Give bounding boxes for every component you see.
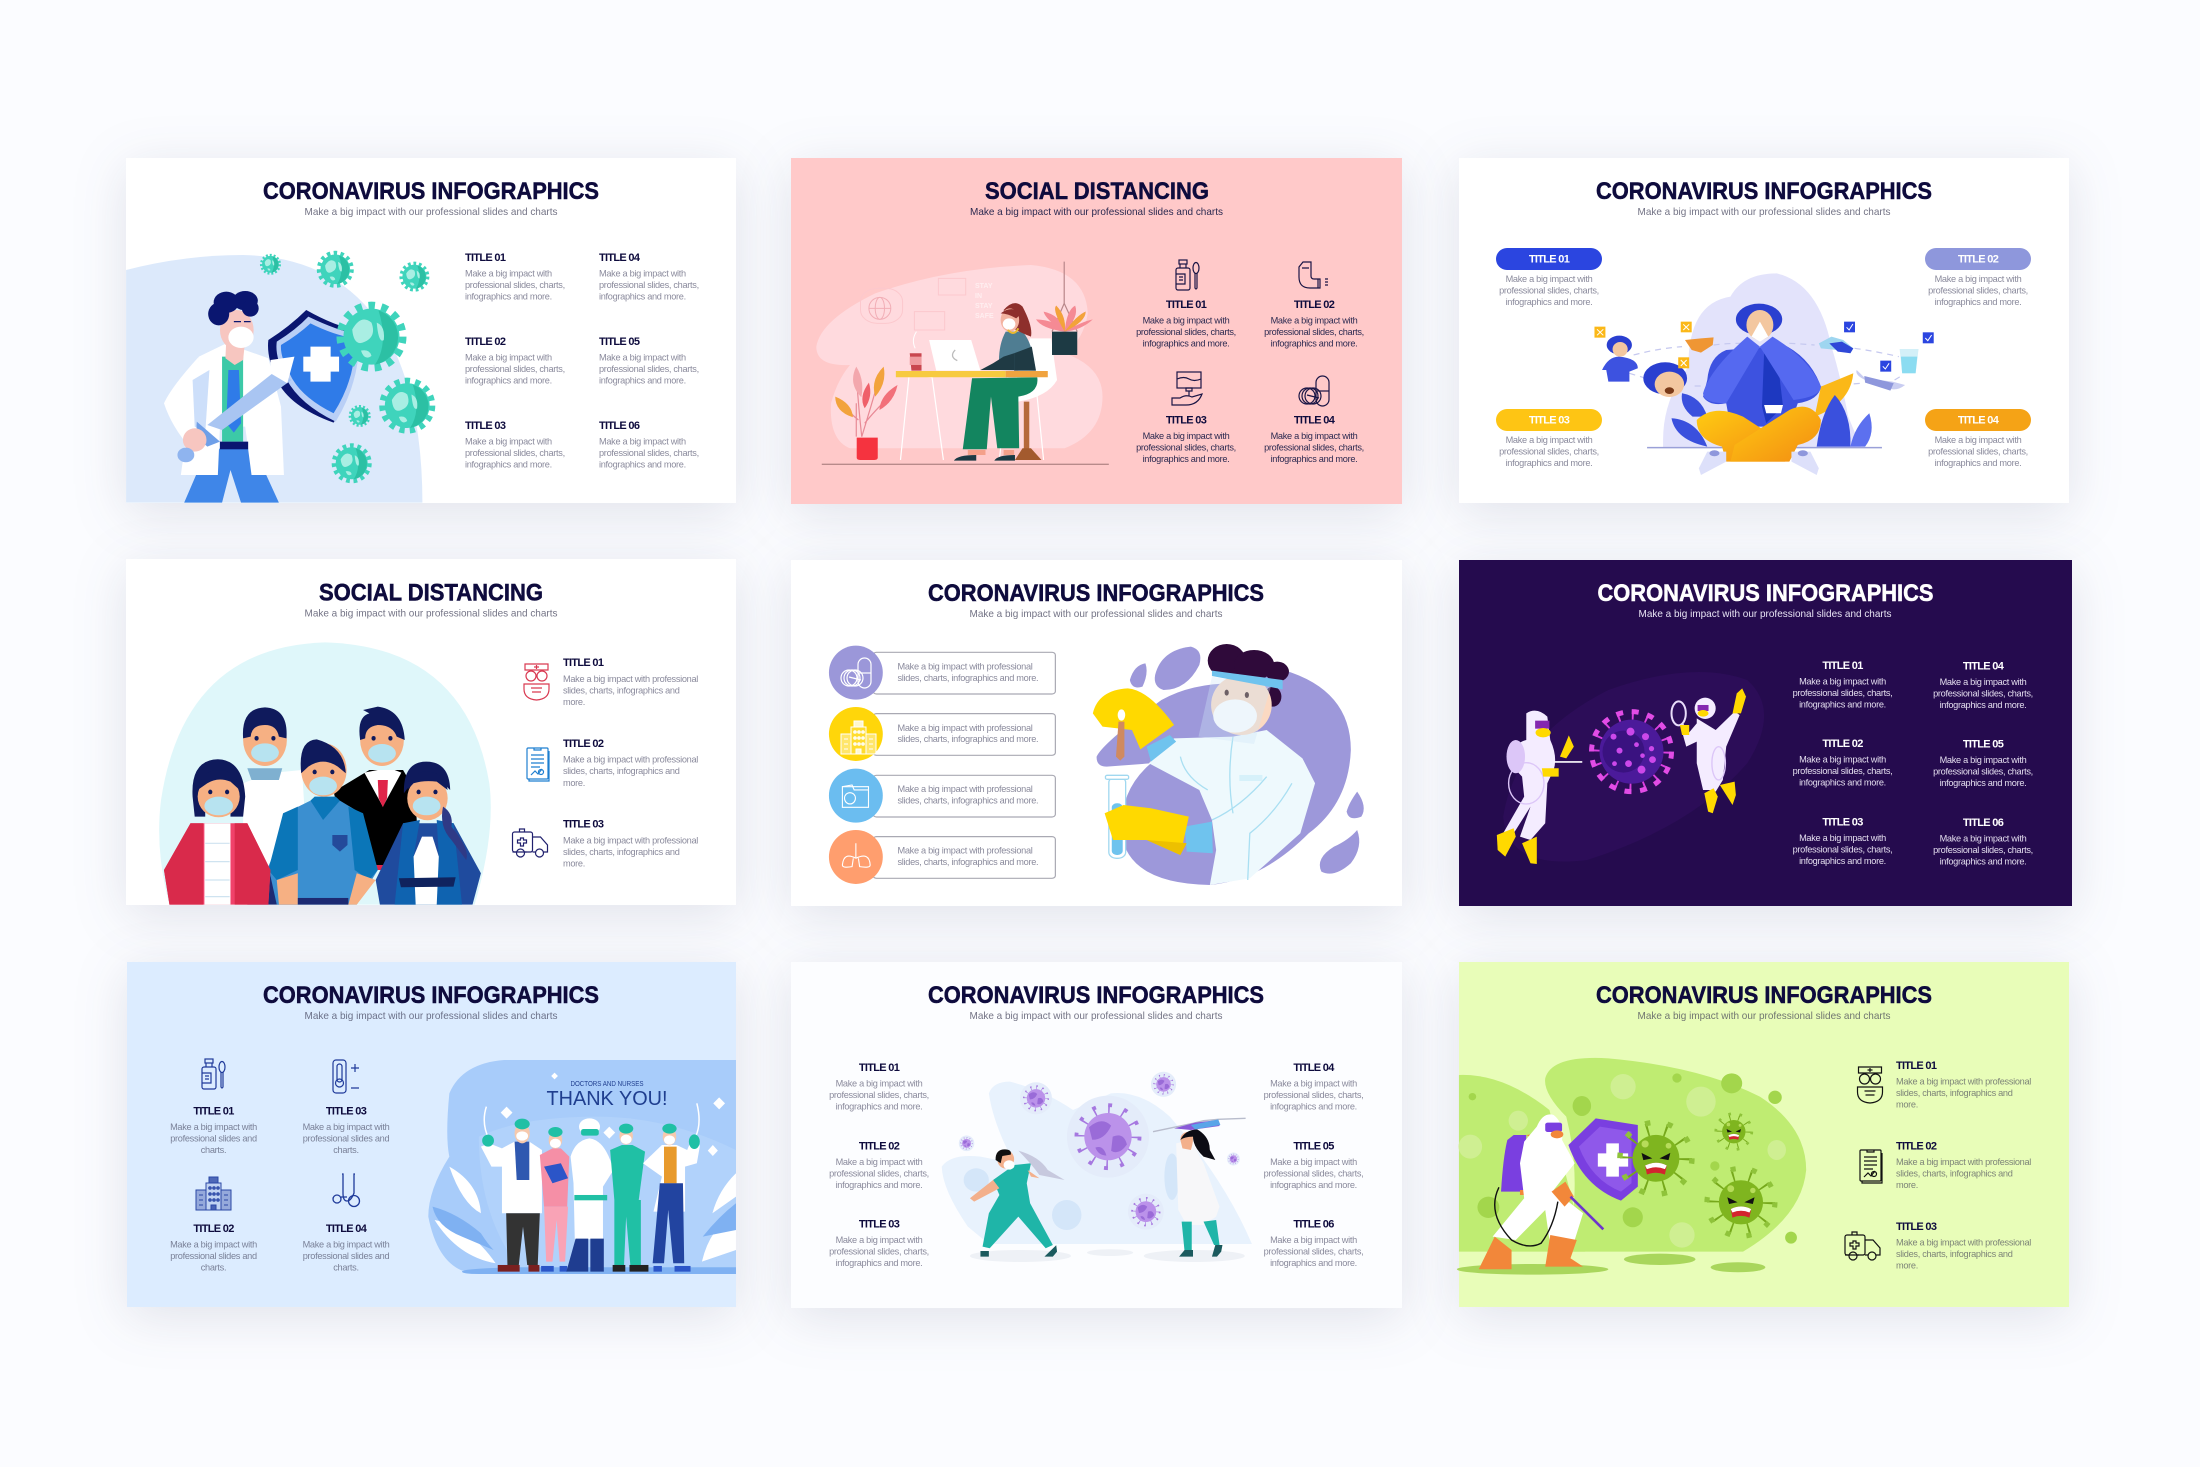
text block: titles 01 to 06: TITLE 05 (1963, 738, 2004, 750)
pill: title 03: TITLE 03 (1529, 414, 1570, 426)
text block: titles 01 to 06: TITLE 06 (1293, 1218, 1334, 1230)
text block: titles 01 to 06: professional slides, charts, (1793, 688, 1892, 698)
text block: titles 01 to 06: infographics and more. (465, 292, 552, 302)
panel: white slide with virus and medical staff (791, 962, 1402, 1308)
pill: title 02: TITLE 02 (1958, 254, 1999, 266)
text block: titles 01 to 03: Make a big impact with professional (563, 754, 698, 764)
subheading: Make a big impact with our professional slides and charts (304, 1011, 558, 1022)
text block: titles 01 to 04: infographics and more. (1271, 454, 1357, 464)
text block: faint stay safe note: STAY (975, 283, 993, 290)
text block: descriptions: professional slides, charts, (1499, 286, 1599, 296)
text block: faint stay safe note: STAY (975, 303, 993, 310)
text block: descriptions: Make a big impact with (1506, 274, 1593, 284)
text block: titles 01 to 06: professional slides, charts, (599, 280, 699, 290)
text block: titles 01 to 06: Make a big impact with (465, 268, 552, 278)
text block: titles 01 to 06: TITLE 01 (465, 252, 506, 264)
text block: titles 01 to 06: infographics and more. (465, 376, 552, 386)
text block: titles 01 to 06: infographics and more. (836, 1180, 922, 1190)
text block: descriptions: professional slides, charts, (1499, 446, 1599, 456)
text block: titles 01 to 04: professional slides and (170, 1134, 257, 1144)
text block: list descriptions: slides, charts, infographics and more. (898, 857, 1038, 867)
text block: titles 01 to 04: Make a big impact with (170, 1122, 257, 1132)
text block: titles 01 to 04: charts. (333, 1145, 359, 1155)
text block: descriptions: infographics and more. (1506, 297, 1592, 307)
text block: titles 01 to 03: slides, charts, infographics and (563, 766, 680, 776)
heading: SOCIAL DISTANCING (985, 178, 1209, 205)
text block: titles 01 to 03: more. (1896, 1260, 1918, 1270)
icon: ambulance (512, 829, 548, 857)
text block: titles 01 to 04: TITLE 03 (1166, 414, 1207, 426)
text block: titles 01 to 06: infographics and more. (836, 1258, 922, 1268)
text block: titles 01 to 06: professional slides, charts, (1933, 766, 2033, 776)
text block: titles 01 to 06: professional slides, charts, (1793, 766, 1892, 776)
text block: titles 01 to 04: charts. (333, 1262, 359, 1272)
illustration: person sneezing with do and don't items (1594, 273, 1934, 475)
text block: list descriptions: slides, charts, infographics and more. (898, 673, 1038, 683)
text block: titles 01 to 06: Make a big impact with (1799, 833, 1886, 843)
subheading: Make a big impact with our professional slides and charts (304, 608, 558, 620)
text block: titles 01 to 06: Make a big impact with (1799, 754, 1886, 764)
icon: medical report (527, 748, 549, 781)
text block: titles 01 to 04: Make a big impact with (1271, 316, 1358, 326)
subheading: Make a big impact with our professional slides and charts (1638, 207, 1890, 218)
illustration: lab technician with test tube (829, 644, 1364, 885)
text block: descriptions: professional slides, charts, (1928, 446, 2028, 456)
text block: list descriptions: slides, charts, infographics and more. (898, 796, 1038, 806)
text block: titles 01 to 06: infographics and more. (465, 460, 552, 470)
text block: titles 01 to 06: TITLE 05 (1293, 1140, 1334, 1152)
text block: titles 01 to 06: Make a big impact with (465, 352, 552, 362)
text block: list descriptions: Make a big impact with professional (898, 723, 1033, 733)
text block: titles 01 to 04: TITLE 04 (326, 1223, 368, 1235)
icon: pills (1299, 376, 1329, 406)
text block: titles 01 to 06: Make a big impact with (1270, 1078, 1357, 1088)
text block: titles 01 to 06: infographics and more. (836, 1102, 922, 1112)
text block: titles 01 to 03: TITLE 02 (1896, 1140, 1937, 1152)
text block: descriptions (1499, 274, 2028, 468)
text block: titles 01 to 04: TITLE 01 (193, 1106, 234, 1118)
panel: coronavirus infographics white slide with doctor and shield (126, 158, 736, 503)
subheading: Make a big impact with our professional slides and charts (1638, 609, 1892, 620)
illustration: nurse and doctor fighting purple virus (942, 1072, 1252, 1262)
text block: titles 01 to 03: more. (563, 697, 585, 707)
icon: hospital (196, 1177, 231, 1210)
icon: medicine bottle (202, 1059, 225, 1089)
text block: titles 01 to 03: Make a big impact with professional (1896, 1238, 2031, 1248)
subheading: Make a big impact with our professional slides and charts (970, 1011, 1222, 1022)
text block: list descriptions: Make a big impact with professional (898, 846, 1033, 856)
illustration: doctors and nurses thank you (428, 1060, 736, 1274)
text block: titles 01 to 06: professional slides, charts, (1933, 688, 2033, 698)
icon: medicine bottle (1176, 260, 1199, 290)
text block: titles 01 to 06: Make a big impact with (465, 436, 552, 446)
text block: titles 01 to 03: more. (1896, 1180, 1918, 1190)
text block: descriptions: infographics and more. (1935, 297, 2021, 307)
text block: titles 01 to 06: Make a big impact with (836, 1078, 923, 1088)
text block: titles 01 to 06: professional slides, charts, (829, 1246, 929, 1256)
text block: titles 01 to 06: TITLE 03 (465, 420, 506, 432)
text block: titles 01 to 06: TITLE 06 (599, 420, 640, 432)
text block: descriptions: infographics and more. (1935, 458, 2021, 468)
pill: title 03 (1496, 409, 1602, 431)
text block: titles 01 to 06: TITLE 04 (1963, 660, 2005, 672)
text block: titles 01 to 03: slides, charts, infographics and (563, 686, 680, 696)
text block: titles 01 to 06: professional slides, charts, (465, 364, 565, 374)
text block: thank you: THANK YOU! (546, 1088, 668, 1110)
text block: titles 01 to 04: charts. (201, 1145, 226, 1155)
text block: titles 01 to 06: TITLE 02 (859, 1140, 900, 1152)
text block: titles 01 to 03: more. (563, 858, 585, 868)
text block: titles 01 to 06: infographics and more. (1940, 856, 2026, 866)
panel: light blue thank-you slide (127, 962, 736, 1307)
panel: dark purple infographic slide (1459, 560, 2072, 906)
text block: titles 01 to 06: TITLE 02 (465, 336, 506, 348)
subheading: Make a big impact with our professional slides and charts (1638, 1011, 1890, 1022)
text block: titles 01 to 03: TITLE 03 (563, 818, 604, 830)
text block: list descriptions: Make a big impact with professional (898, 784, 1033, 794)
text block: titles 01 to 06: Make a big impact with (1940, 755, 2027, 765)
text block: titles 01 to 06: TITLE 03 (1822, 816, 1863, 828)
text block: titles 01 to 06: professional slides, charts, (1264, 1090, 1363, 1100)
text block: titles 01 to 06: professional slides, charts, (465, 280, 565, 290)
text block: titles 01 to 03: slides, charts, infographics and (1896, 1088, 2013, 1098)
icon: hospital (841, 721, 876, 754)
text block: titles 01 to 06 (829, 1062, 1363, 1268)
text block: titles 01 to 06: infographics and more. (599, 292, 686, 302)
text block: titles 01 to 06: infographics and more. (1799, 856, 1886, 866)
heading: CORONAVIRUS INFOGRAPHICS (1596, 982, 1932, 1009)
text block: titles 01 to 04: infographics and more. (1143, 338, 1229, 348)
text block: titles 01 to 04: TITLE 02 (1294, 299, 1335, 311)
text block: titles 01 to 03: TITLE 03 (1896, 1221, 1937, 1233)
text block: list descriptions: slides, charts, infographics and more. (898, 734, 1038, 744)
text block: titles 01 to 06 (1793, 660, 2033, 866)
text block: titles 01 to 06: infographics and more. (599, 460, 686, 470)
text block: descriptions: infographics and more. (1506, 458, 1592, 468)
text block: faint stay safe note: SAFE (975, 313, 994, 320)
icon: nurse face (524, 664, 549, 700)
text block: titles 01 to 06: infographics and more. (599, 376, 686, 386)
text block: titles 01 to 04 (1136, 299, 1364, 464)
text block: titles 01 to 04: professional slides and (303, 1251, 389, 1261)
text block: titles 01 to 04: Make a big impact with (1271, 431, 1358, 441)
text block: titles 01 to 06: professional slides, charts, (1264, 1168, 1363, 1178)
text block: titles 01 to 03: Make a big impact with professional (563, 674, 698, 684)
illustration: doctor with shield fighting green viruses (126, 254, 431, 503)
panel: infographics with pills and sitting person (1459, 158, 2069, 503)
text block: titles 01 to 06: Make a big impact with (1270, 1157, 1357, 1167)
heading: CORONAVIRUS INFOGRAPHICS (928, 982, 1264, 1009)
icon: stethoscope (333, 1174, 360, 1206)
text block: titles 01 to 06: Make a big impact with (1270, 1235, 1357, 1245)
text block: titles 01 to 06: professional slides, charts, (1793, 844, 1892, 854)
text block: titles 01 to 03: slides, charts, infographics and (563, 847, 680, 857)
subheading: Make a big impact with our professional slides and charts (304, 207, 558, 218)
text block: doctors and nurses caption: DOCTORS AND NURSES (570, 1079, 644, 1088)
subheading: Make a big impact with our professional slides and charts (970, 207, 1223, 218)
text block: titles 01 to 06: professional slides, charts, (1264, 1246, 1363, 1256)
icon: inhaler (1299, 262, 1328, 288)
text block: titles 01 to 06: infographics and more. (1270, 1258, 1357, 1268)
text block: titles 01 to 06: Make a big impact with (1940, 677, 2027, 687)
text block: titles 01 to 06: Make a big impact with (836, 1157, 923, 1167)
text block: titles 01 to 06: TITLE 03 (859, 1218, 900, 1230)
text block: titles 01 to 03: slides, charts, infographics and (1896, 1168, 2013, 1178)
text block: titles 01 to 04: Make a big impact with (303, 1122, 390, 1132)
pill: title 02 (1925, 248, 2031, 270)
illustration: masked group of people (159, 642, 491, 905)
text block: titles 01 to 04: professional slides, charts, (1136, 327, 1236, 337)
text block: titles 01 to 04: Make a big impact with (303, 1240, 390, 1250)
text block: titles 01 to 06: TITLE 01 (1822, 660, 1863, 672)
text block: titles 01 to 06: infographics and more. (1270, 1180, 1357, 1190)
illustration: hazmat worker with shield and viruses (1457, 1058, 1806, 1275)
text block: titles 01 to 03: more. (1896, 1100, 1918, 1110)
text block: titles 01 to 06: infographics and more. (1799, 700, 1886, 710)
text block: titles 01 to 06: professional slides, charts, (599, 364, 699, 374)
text block: titles 01 to 03: slides, charts, infographics and (1896, 1249, 2013, 1259)
text block: titles 01 to 06: TITLE 04 (599, 252, 641, 264)
text block: titles 01 to 04: professional slides and (170, 1251, 257, 1261)
subheading: Make a big impact with our professional slides and charts (970, 609, 1222, 620)
text block: titles 01 to 03 (563, 657, 698, 868)
text block: titles 01 to 04: Make a big impact with (1143, 316, 1230, 326)
text block: titles 01 to 03: more. (563, 778, 585, 788)
text block: titles 01 to 06: TITLE 04 (1293, 1062, 1335, 1074)
panel: infographics with list and lab technician (791, 560, 1402, 906)
pill: title 04 (1925, 409, 2031, 431)
text block: titles 01 to 04: TITLE 04 (1294, 414, 1336, 426)
panel: social distancing pink slide (791, 158, 1402, 504)
text block: titles 01 to 04: Make a big impact with (170, 1240, 257, 1250)
text block: titles 01 to 06: TITLE 06 (1963, 817, 2004, 829)
text block: descriptions: Make a big impact with (1935, 435, 2022, 445)
heading: CORONAVIRUS INFOGRAPHICS (263, 982, 599, 1009)
heading: CORONAVIRUS INFOGRAPHICS (928, 580, 1264, 607)
text block: titles 01 to 06: Make a big impact with (599, 436, 686, 446)
text block: titles 01 to 03: TITLE 02 (563, 738, 604, 750)
text block: titles 01 to 04: infographics and more. (1271, 338, 1357, 348)
icon: thermometer (333, 1060, 359, 1093)
text block: descriptions: Make a big impact with (1506, 435, 1593, 445)
text block: titles 01 to 03: Make a big impact with professional (1896, 1157, 2031, 1167)
text block: titles 01 to 06: professional slides, charts, (829, 1090, 929, 1100)
text block: titles 01 to 04: infographics and more. (1143, 454, 1229, 464)
text block: titles 01 to 04: professional slides, charts, (1264, 442, 1364, 452)
text block: titles 01 to 04: professional slides, charts, (1264, 327, 1364, 337)
text block: titles 01 to 06: infographics and more. (1270, 1102, 1357, 1112)
text block: titles 01 to 06: infographics and more. (1940, 700, 2026, 710)
text block: list descriptions: Make a big impact with professional (898, 662, 1033, 672)
text block: titles 01 to 03: Make a big impact with professional (563, 836, 698, 846)
heading: CORONAVIRUS INFOGRAPHICS (263, 178, 599, 205)
text block: titles 01 to 06 (465, 252, 699, 470)
text block: titles 01 to 06: Make a big impact with (836, 1235, 923, 1245)
text block: titles 01 to 06: professional slides, charts, (465, 448, 565, 458)
pill: title 04: TITLE 04 (1958, 414, 2000, 426)
illustration: woman working at desk (816, 262, 1109, 464)
text block: faint stay safe note: IN (975, 293, 982, 300)
text block: titles 01 to 04: TITLE 03 (326, 1106, 367, 1118)
text block: list descriptions (898, 662, 1038, 867)
icon: pills (841, 658, 871, 688)
icon: ambulance (1845, 1232, 1880, 1260)
panel: lime green slide with sprayer and angry viruses (1457, 962, 2069, 1307)
heading: CORONAVIRUS INFOGRAPHICS (1596, 178, 1932, 205)
text block: titles 01 to 06: infographics and more. (1799, 778, 1886, 788)
pill: title 01 (1496, 248, 1602, 270)
icon: medical report (1860, 1150, 1882, 1183)
text block: titles 01 to 06: Make a big impact with (1799, 676, 1886, 686)
text block: titles 01 to 06: professional slides, charts, (1933, 845, 2033, 855)
pill: title 01: TITLE 01 (1529, 254, 1570, 266)
text block: titles 01 to 04 (170, 1106, 390, 1272)
text block: titles 01 to 06: Make a big impact with (599, 268, 686, 278)
text block: titles 01 to 04: TITLE 01 (1166, 299, 1207, 311)
illustration: hazmat astronauts examining virus (1497, 672, 1764, 864)
text block: titles 01 to 03: TITLE 01 (563, 657, 604, 669)
text block: titles 01 to 03 (1896, 1060, 2031, 1270)
heading: CORONAVIRUS INFOGRAPHICS (1598, 580, 1934, 607)
text block: titles 01 to 04: TITLE 02 (193, 1223, 234, 1235)
text block: descriptions: Make a big impact with (1935, 274, 2022, 284)
text block: titles 01 to 06: TITLE 01 (859, 1062, 900, 1074)
text block: titles 01 to 06: infographics and more. (1940, 778, 2026, 788)
heading: SOCIAL DISTANCING (319, 580, 543, 606)
text block: titles 01 to 06: Make a big impact with (1940, 834, 2027, 844)
text block: titles 01 to 06: professional slides, charts, (599, 448, 699, 458)
text block: titles 01 to 04: professional slides and (303, 1134, 389, 1144)
text block: titles 01 to 04: professional slides, charts, (1136, 442, 1236, 452)
text block: titles 01 to 04: Make a big impact with (1143, 431, 1230, 441)
icon: hand sanitizer (1172, 372, 1202, 405)
icon: nurse face (1858, 1067, 1882, 1103)
text block: descriptions: professional slides, charts, (1928, 286, 2028, 296)
text block: titles 01 to 06: Make a big impact with (599, 352, 686, 362)
text block: titles 01 to 06: TITLE 02 (1822, 738, 1863, 750)
text block: faint stay safe note (975, 283, 994, 320)
text block: titles 01 to 06: professional slides, charts, (829, 1168, 929, 1178)
text block: titles 01 to 03: TITLE 01 (1896, 1060, 1937, 1072)
text block: titles 01 to 06: TITLE 05 (599, 336, 640, 348)
text block: titles 01 to 04: charts. (201, 1262, 226, 1272)
panel: social distancing white slide with group (126, 559, 736, 905)
text block: titles 01 to 03: Make a big impact with professional (1896, 1076, 2031, 1086)
